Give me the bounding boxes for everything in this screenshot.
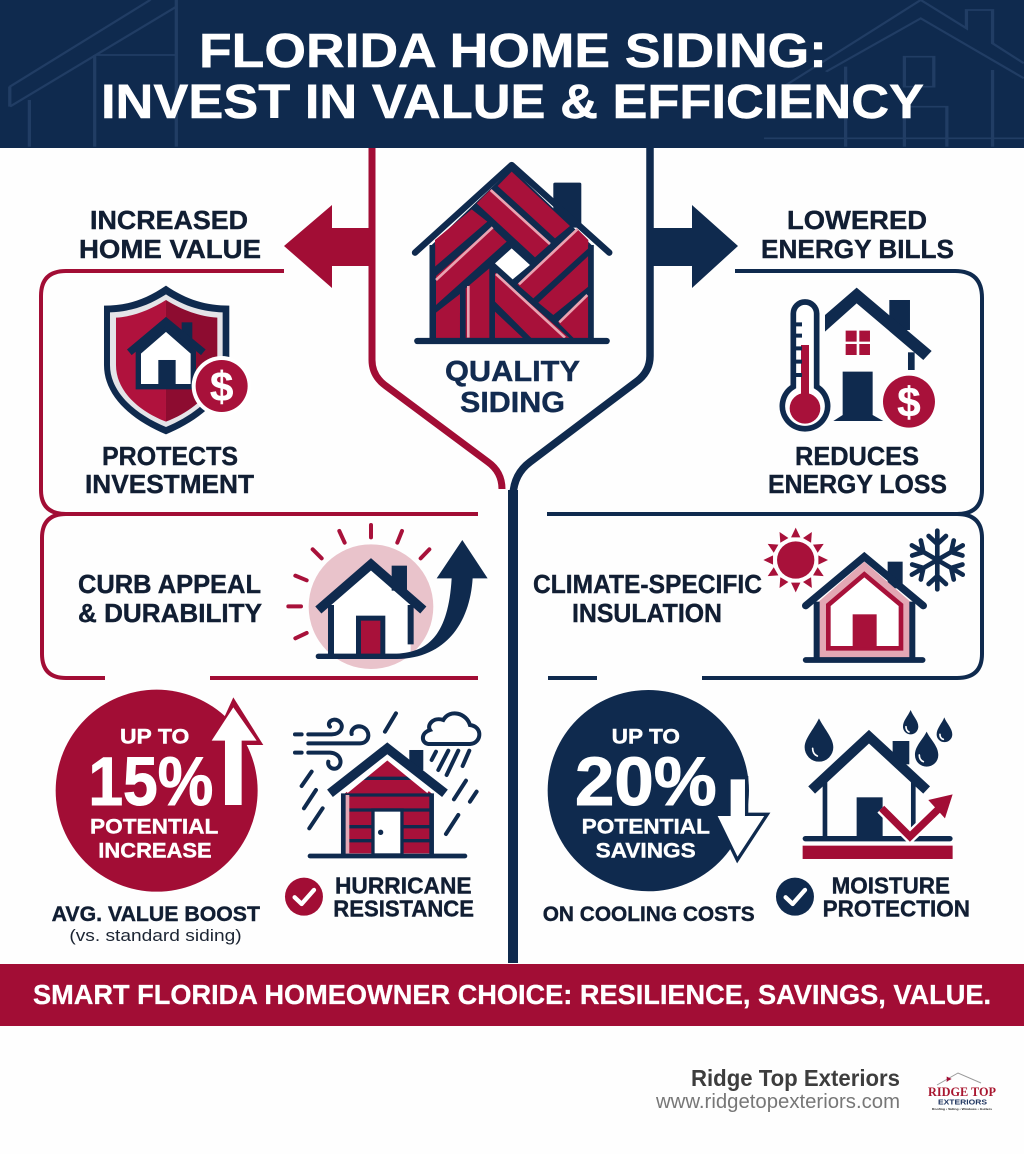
label: quality siding: SIDING <box>460 387 565 419</box>
stat: up to 20%: UP TO <box>612 725 680 748</box>
text: climate-specific insulation: INSULATION <box>572 598 722 628</box>
logo <box>928 1073 996 1111</box>
text: reduces energy loss: ENERGY LOSS <box>768 469 947 499</box>
heading: increased home value: INCREASED <box>90 205 248 235</box>
title: FLORIDA HOME SIDING: <box>199 25 827 78</box>
banner: SMART FLORIDA HOMEOWNER CHOICE: RESILIENCE, SAVINGS, VALUE. <box>33 979 991 1010</box>
heading: lowered energy bills: LOWERED <box>787 205 927 235</box>
callout: hurricane resistance: HURRICANE <box>335 872 472 898</box>
icon: thermometer and house: $ <box>897 379 921 426</box>
callout: moisture protection: PROTECTION <box>823 896 970 922</box>
heading: lowered energy bills <box>761 205 954 264</box>
left flow line <box>372 148 502 489</box>
logo: Roofing • Siding • Windows • Gutters <box>932 1107 992 1111</box>
stat: up to 15%: 15% <box>88 744 213 820</box>
icon: sun <box>763 528 828 592</box>
stat: up to 20%: 20% <box>575 744 717 820</box>
footer company name: Ridge Top Exteriors <box>691 1065 900 1091</box>
icon: shield <box>104 286 252 434</box>
stat: up to 15%: POTENTIAL <box>90 815 218 838</box>
text: curb appeal: CURB APPEAL <box>78 569 261 599</box>
header band <box>0 0 1024 148</box>
callout: moisture protection <box>776 872 970 922</box>
panel: protects investment <box>41 271 478 514</box>
text: climate-specific insulation: CLIMATE-SPECIFIC <box>533 569 762 599</box>
panel: reduces energy loss <box>547 271 982 514</box>
callout: hurricane resistance: RESISTANCE <box>333 896 474 922</box>
panel: climate insulation <box>533 514 982 678</box>
logo: EXTERIORS <box>938 1100 987 1106</box>
arrow: right navy <box>650 205 738 288</box>
icon: house with rising arrow <box>288 525 488 669</box>
callout: hurricane resistance <box>285 872 474 922</box>
text: on cooling costs: ON COOLING COSTS <box>543 903 755 926</box>
title <box>101 25 924 129</box>
text: avg value boost <box>52 903 260 945</box>
logo: RIDGE TOP <box>928 1085 996 1099</box>
text: protects investment: INVESTMENT <box>85 469 254 499</box>
icon: hurricane house <box>295 713 479 856</box>
title: INVEST IN VALUE & EFFICIENCY <box>101 76 924 129</box>
text: protects investment: PROTECTS <box>102 441 238 471</box>
text: protects investment <box>85 441 254 499</box>
callout: moisture protection: MOISTURE <box>832 872 950 898</box>
footer url: www.ridgetopexteriors.com <box>655 1091 900 1113</box>
heading: increased home value: HOME VALUE <box>79 234 261 264</box>
label: quality siding <box>445 356 580 419</box>
stat: up to 15%: UP TO <box>120 725 189 748</box>
icon: snowflake <box>908 531 967 589</box>
icon: quality siding house <box>415 165 609 341</box>
icon: moisture house <box>803 710 953 859</box>
panel: curb appeal <box>42 514 488 678</box>
text: reduces energy loss: REDUCES <box>795 441 919 471</box>
arrow: left red <box>284 205 372 288</box>
heading: lowered energy bills: ENERGY BILLS <box>761 234 954 264</box>
label: quality siding: QUALITY <box>445 356 580 388</box>
text: avg value boost: AVG. VALUE BOOST <box>52 903 260 926</box>
icon: shield: $ <box>210 363 233 410</box>
stat: up to 20%: POTENTIAL <box>582 815 710 838</box>
icon: thermometer and house <box>782 288 935 429</box>
stat: up to 20% <box>548 690 767 891</box>
heading: increased home value <box>79 205 261 264</box>
text: reduces energy loss <box>768 441 947 499</box>
stat: up to 20%: SAVINGS <box>596 840 696 863</box>
text: curb appeal <box>78 569 262 628</box>
stat: up to 15%: INCREASE <box>98 840 212 863</box>
right flow line <box>513 148 650 963</box>
text: curb appeal: & DURABILITY <box>78 598 262 628</box>
text: climate-specific insulation <box>533 569 762 628</box>
icon: insulated house <box>806 557 923 660</box>
text: avg value boost: (vs. standard siding) <box>69 926 242 945</box>
stat: up to 15% <box>56 690 263 892</box>
banner <box>0 964 1024 1026</box>
